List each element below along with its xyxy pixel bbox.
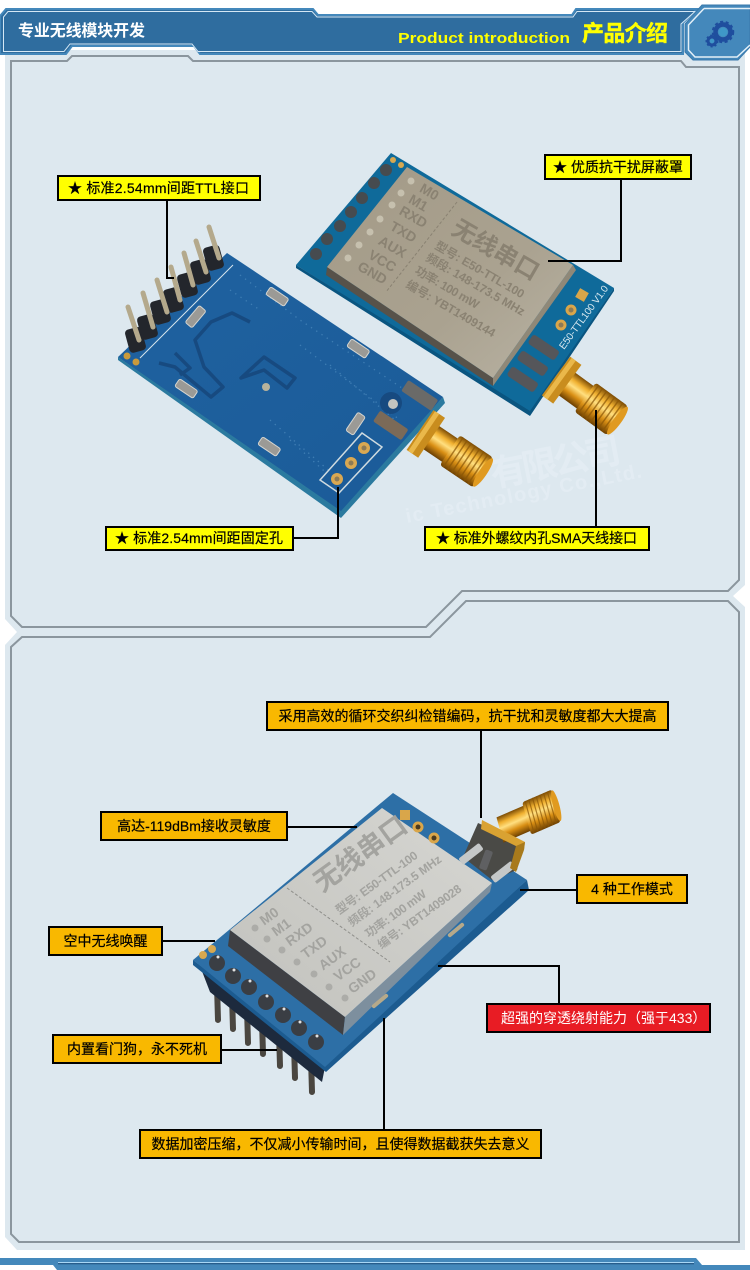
sma connector perspective bbox=[481, 788, 564, 872]
callout: penetration bbox=[487, 1004, 710, 1032]
callout: wireless wake bbox=[49, 927, 162, 955]
pin posts bbox=[217, 985, 312, 1092]
watermark bbox=[404, 429, 644, 528]
callout: shield bbox=[545, 155, 691, 179]
pin labels: GND bbox=[345, 965, 379, 997]
pin labels: RXD bbox=[282, 919, 316, 949]
connector well bbox=[463, 823, 523, 880]
pin marker dots bbox=[252, 924, 348, 1002]
silver pads bbox=[175, 287, 370, 456]
pcb silk outline bbox=[140, 265, 233, 358]
pin labels bbox=[355, 180, 442, 287]
pin header bbox=[124, 227, 225, 354]
icon box: gears bbox=[685, 5, 750, 60]
pin tops bbox=[209, 955, 324, 1050]
gold corner pads bbox=[124, 352, 140, 366]
callout: encryption: 数据加密压缩，不仅减小传输时间，且使得数据截获失去意义 bbox=[152, 1136, 530, 1152]
pcb top bbox=[193, 793, 527, 1067]
callout: fixing holes: ★ 标准2.54mm间距固定孔 bbox=[115, 530, 283, 546]
edge pins bbox=[310, 164, 392, 260]
callout: work modes: 4 种工作模式 bbox=[591, 881, 673, 897]
icon: large gear bbox=[713, 22, 733, 42]
callout: coding: 采用高效的循环交织纠检错编码，抗干扰和灵敏度都大大提高 bbox=[278, 708, 656, 724]
panel: product photo outline bbox=[11, 56, 739, 627]
corner pads bbox=[199, 945, 216, 959]
module spec lines bbox=[333, 848, 464, 952]
footer bar bbox=[0, 1258, 750, 1270]
module spec lines: 编号: YBT1409144 bbox=[404, 277, 499, 340]
pin housing bbox=[200, 966, 325, 1082]
pin labels: GND bbox=[355, 258, 390, 287]
shield can bbox=[327, 167, 573, 378]
callout: watchdog bbox=[53, 1035, 221, 1063]
header bar bbox=[0, 9, 697, 54]
watermark: 有限公司 bbox=[487, 429, 624, 495]
pin labels: M0 bbox=[417, 180, 442, 204]
sma connector back bbox=[407, 410, 500, 495]
pin labels: M1 bbox=[268, 915, 294, 939]
module name: 无线串口 bbox=[308, 810, 413, 898]
module spec lines: 编号: YBT1409028 bbox=[374, 881, 464, 952]
header english title: Product introduction bbox=[398, 31, 570, 47]
module spec lines: 型号: E50-TTL-100 bbox=[432, 238, 527, 301]
pcb silk text: E50-TTL100 V1.0 bbox=[558, 283, 611, 352]
shield divider bbox=[386, 202, 457, 292]
gold pads bbox=[400, 810, 440, 844]
via dots bbox=[230, 275, 420, 490]
metal tabs bbox=[373, 380, 438, 440]
header chinese title: 产品介绍 bbox=[582, 21, 668, 46]
module spec lines: 频段: 148-173.5 MHz bbox=[424, 250, 528, 319]
callout: TTL interface bbox=[58, 176, 260, 200]
watermark: ic Technology Co.,Ltd. bbox=[404, 461, 644, 528]
ground hole bbox=[380, 392, 402, 414]
pin highlights bbox=[216, 956, 318, 1038]
shield side face bbox=[228, 930, 345, 1035]
icon: small gear bbox=[706, 36, 718, 46]
callout: TTL interface: ★ 标准2.54mm间距TTL接口 bbox=[68, 180, 249, 196]
shield side bbox=[326, 267, 493, 386]
gold pads bbox=[556, 288, 589, 330]
callout: coding bbox=[267, 702, 668, 730]
pin labels: AUX bbox=[315, 942, 349, 973]
callout: watchdog: 内置看门狗，永不死机 bbox=[67, 1041, 207, 1057]
callout: sensitivity: 高达-119dBm接收灵敏度 bbox=[117, 818, 271, 834]
module spec lines: 型号: E50-TTL-100 bbox=[333, 848, 421, 917]
module spec lines bbox=[404, 238, 528, 340]
pin labels: TXD bbox=[298, 932, 330, 962]
callout: sensitivity bbox=[101, 812, 287, 840]
photo: module back side bbox=[118, 227, 500, 518]
callout: encryption bbox=[140, 1130, 541, 1158]
shield divider bbox=[287, 888, 390, 962]
callout: shield: ★ 优质抗干扰屏蔽罩 bbox=[553, 159, 683, 175]
callout: penetration: 超强的穿透绕射能力（强于433） bbox=[501, 1010, 706, 1026]
module spec lines: 功率: 100 mW bbox=[412, 263, 483, 312]
callout: work modes bbox=[577, 875, 687, 903]
pin labels: TXD bbox=[387, 218, 420, 246]
pcb side edge bbox=[193, 880, 529, 1072]
pin labels: VCC bbox=[330, 954, 364, 984]
center via bbox=[262, 383, 270, 391]
pcb back bbox=[118, 253, 443, 515]
header title left: 专业无线模块开发 bbox=[18, 21, 145, 40]
callout: SMA connector: ★ 标准外螺纹内孔SMA天线接口 bbox=[436, 530, 637, 546]
pin marker dots bbox=[344, 178, 414, 262]
sma connector front bbox=[542, 357, 635, 442]
slot pads bbox=[371, 922, 465, 1009]
pin labels: AUX bbox=[376, 232, 410, 261]
callout: fixing holes bbox=[106, 527, 293, 550]
metal contacts bbox=[458, 843, 516, 883]
leader lines bbox=[163, 180, 621, 1129]
pin labels bbox=[256, 904, 379, 997]
module spec lines: 功率: 100 mW bbox=[362, 886, 429, 941]
photo: module perspective view bbox=[193, 788, 564, 1092]
copper traces bbox=[159, 313, 295, 397]
pin labels: M0 bbox=[256, 904, 282, 928]
mounting hole strip bbox=[320, 433, 382, 493]
pcb front bbox=[296, 153, 614, 413]
module name: 无线串口 bbox=[447, 215, 544, 286]
corner pads bbox=[390, 157, 404, 168]
callout: SMA connector bbox=[425, 527, 649, 550]
metal pads near connector bbox=[506, 334, 560, 393]
pin labels: RXD bbox=[397, 202, 430, 231]
panel: features outline bbox=[11, 601, 739, 1242]
callout: wireless wake: 空中无线唤醒 bbox=[64, 933, 148, 949]
photo: module front side bbox=[296, 153, 635, 442]
module spec lines: 频段: 148-173.5 MHz bbox=[345, 851, 444, 929]
pin labels: VCC bbox=[366, 246, 399, 275]
shield top bbox=[230, 808, 492, 1017]
pin labels: M1 bbox=[406, 191, 431, 215]
